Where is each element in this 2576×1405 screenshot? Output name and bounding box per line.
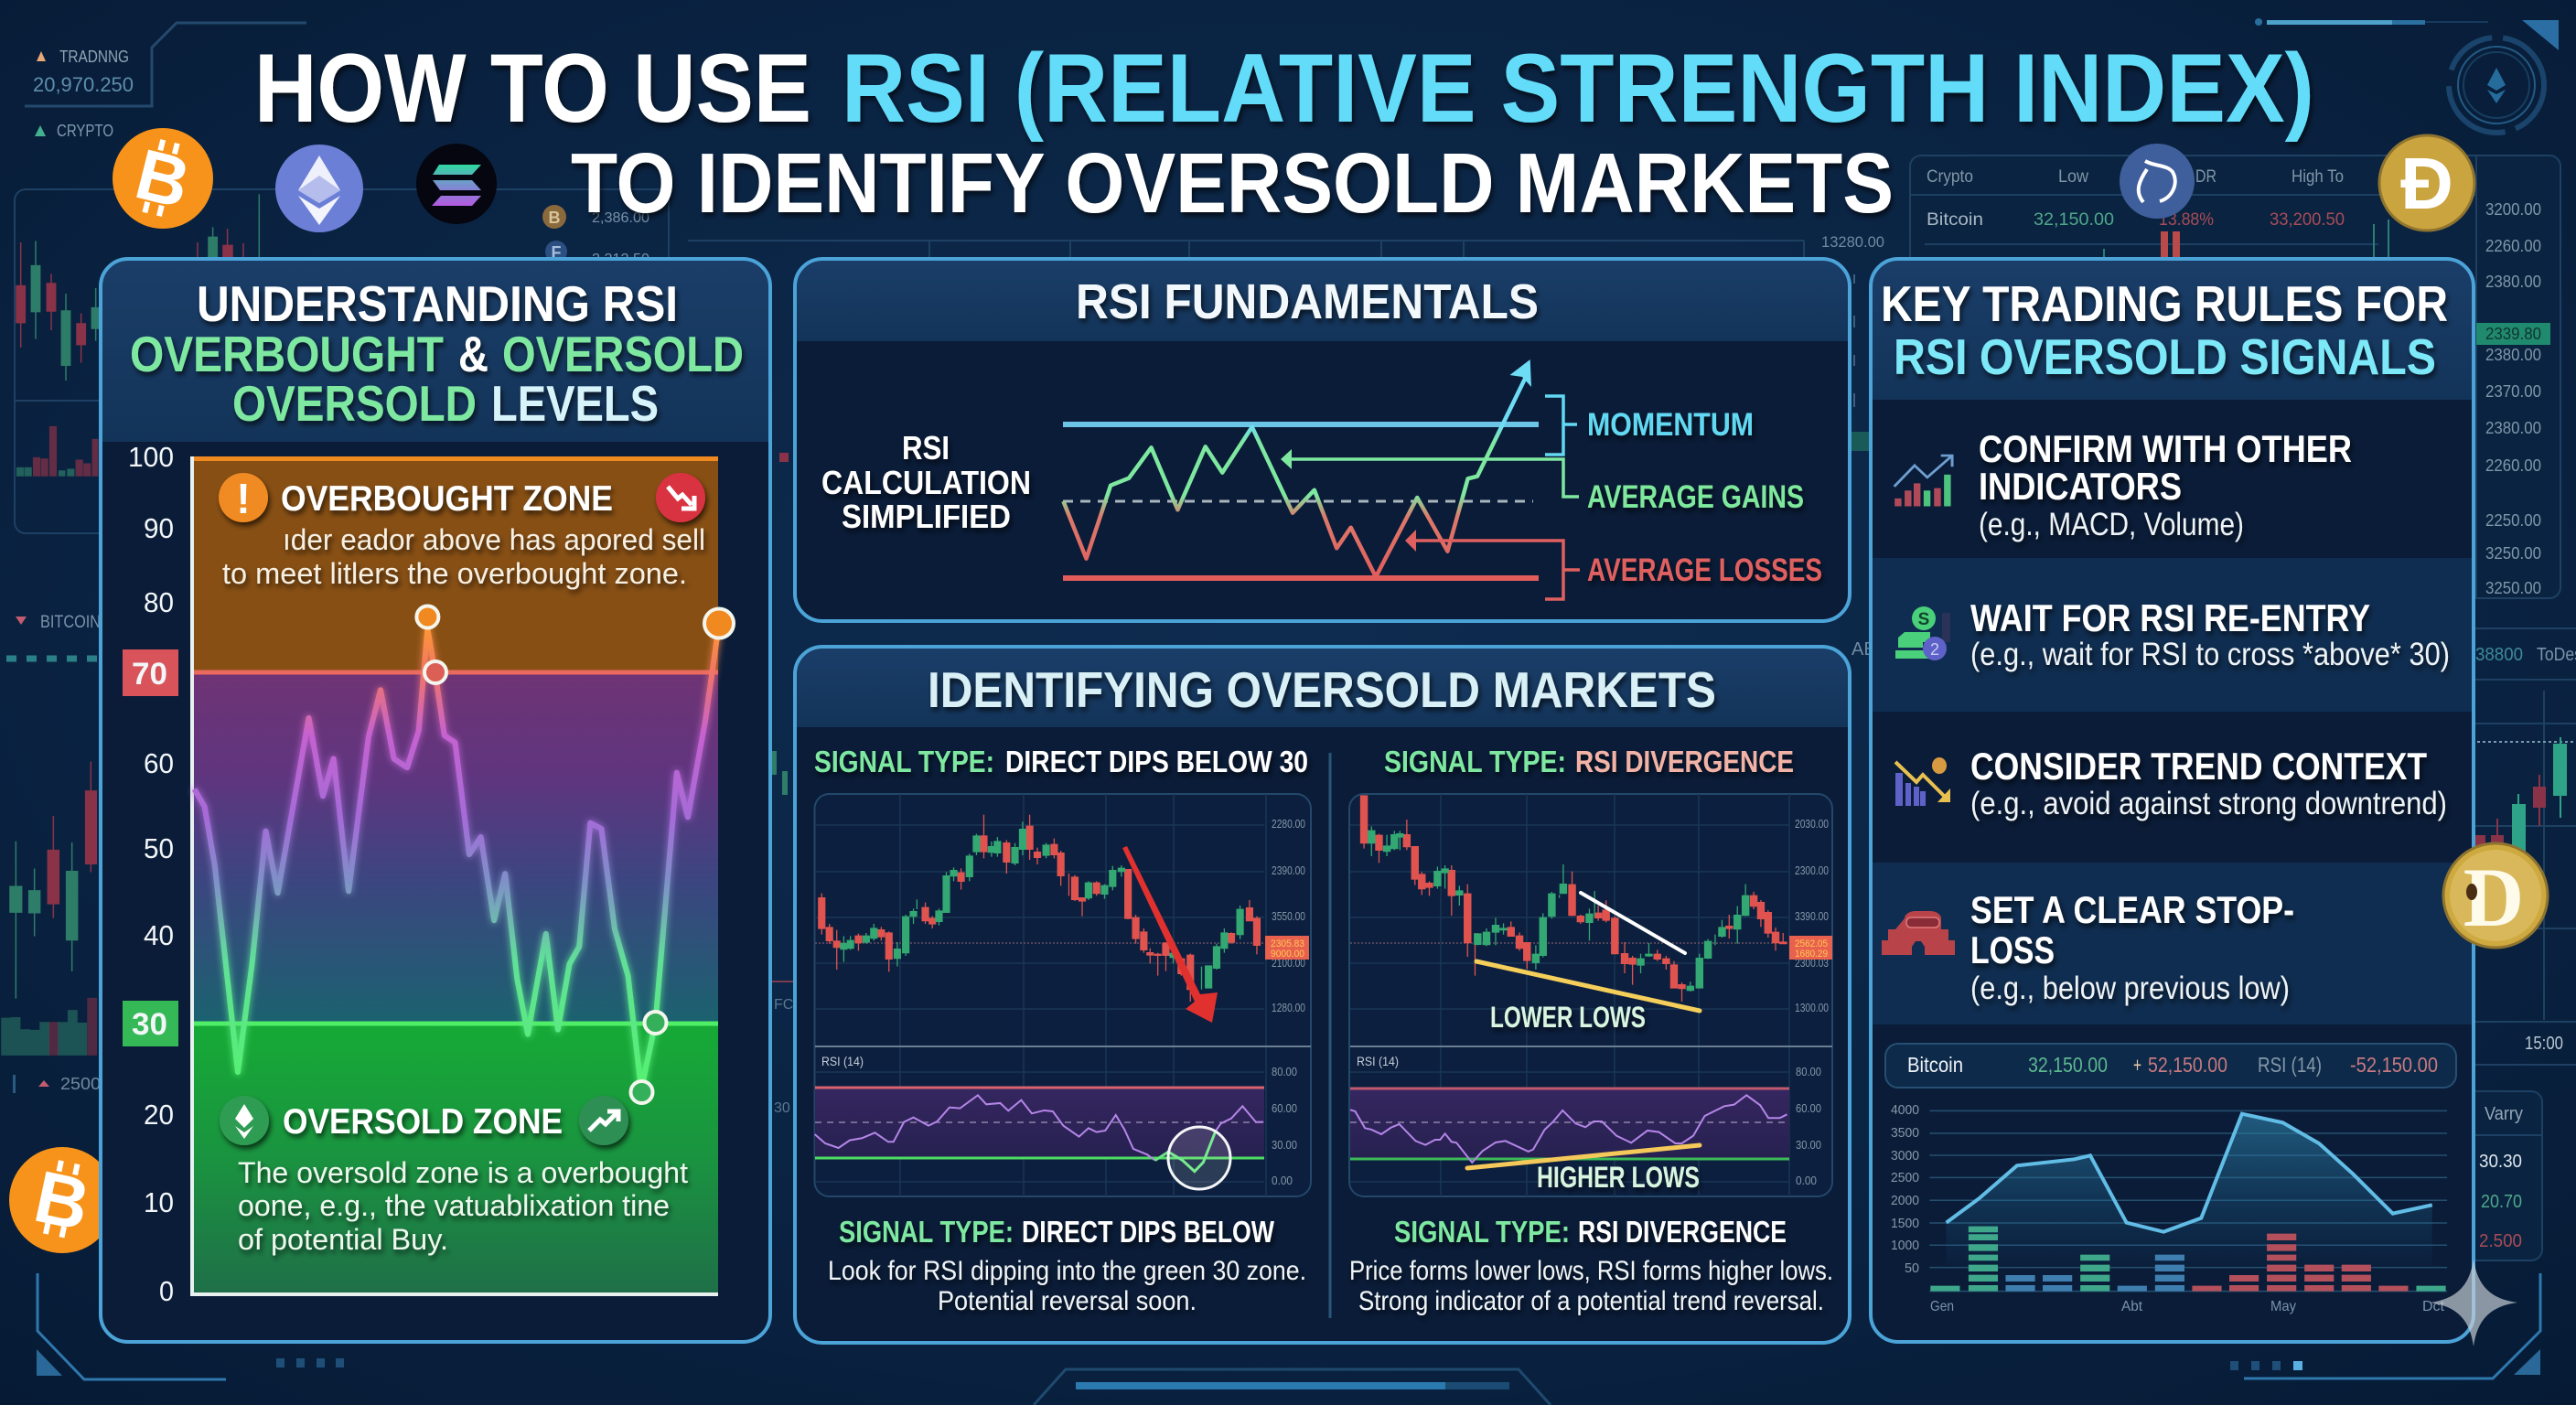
heading: key trading rules: RSI OVERSOLD SIGNALS — [1894, 328, 2436, 385]
price labels: 1280.00 — [1272, 1001, 1305, 1014]
signal description: direct dips: SIGNAL TYPE: — [839, 1215, 1014, 1249]
mini chart: 3000 — [1891, 1148, 1919, 1164]
background hud bottom centre — [1034, 1369, 1551, 1405]
background right chart strip: 20.70 — [2481, 1192, 2522, 1212]
background axis labels right: 2260.00 — [2485, 237, 2541, 255]
mini chart: 1000 — [1891, 1238, 1919, 1253]
background hud top left: TRADNNG — [59, 48, 129, 66]
signal heading: direct dips — [814, 745, 1308, 778]
icon: bitcoin coin lower left — [9, 1147, 115, 1253]
background small coins and prices: F — [551, 243, 562, 262]
price labels: RSI (14) — [821, 1054, 864, 1068]
background axis labels right: 3200.00 — [2485, 200, 2541, 219]
mini table — [1885, 1044, 2456, 1088]
background hud bottom right — [2230, 1273, 2540, 1378]
signal description: divergence: RSI DIVERGENCE — [1578, 1215, 1787, 1249]
price labels: 2305.83 — [1271, 938, 1304, 949]
rule 4: set a clear stop-loss — [1970, 888, 2294, 1006]
background marks between panels: 30 — [774, 1100, 790, 1116]
signal heading: divergence: SIGNAL TYPE: — [1384, 745, 1566, 778]
heading: understanding RSI: OVERSOLD — [502, 326, 744, 382]
label: RSI calculation simplified — [821, 429, 1031, 535]
signal heading: direct dips: SIGNAL TYPE: — [814, 745, 994, 778]
background hud top left: CRYPTO — [57, 122, 113, 140]
rule 3: consider trend context: CONSIDER TREND CONTEXT — [1970, 745, 2427, 788]
RSI zones chart — [190, 456, 734, 1294]
mini chart: Gen — [1930, 1299, 1954, 1314]
signal description: direct dips: DIRECT DIPS BELOW — [1022, 1215, 1275, 1249]
price labels: 60.00 — [1272, 1101, 1297, 1115]
axis scale: 60 — [144, 747, 174, 779]
rule 2: wait for RSI re-entry: WAIT FOR RSI RE-ENTRY — [1970, 596, 2370, 639]
price labels: 0.00 — [1272, 1174, 1293, 1187]
background crypto table top right: High To — [2292, 167, 2344, 187]
panel: understanding RSI levels — [101, 259, 770, 1342]
title — [254, 33, 2314, 231]
signal description: divergence: SIGNAL TYPE: — [1394, 1215, 1570, 1249]
momentum bracket — [1545, 396, 1577, 455]
background marks between panels — [770, 274, 1876, 1116]
price labels: 2280.00 — [1272, 817, 1305, 831]
rule 4: set a clear stop-loss: SET A CLEAR STOP- — [1970, 888, 2294, 931]
price labels — [821, 817, 1309, 1187]
label: RSI calculation simplified: SIMPLIFIED — [842, 498, 1011, 535]
labels: AVERAGE GAINS — [1587, 479, 1804, 515]
overbought zone callout: ! — [236, 475, 251, 522]
price labels: 0.00 — [1796, 1174, 1817, 1187]
icon: ethereum hud ring — [2449, 38, 2544, 133]
background axis labels right: 2370.00 — [2485, 382, 2541, 401]
title: RSI (RELATIVE STRENGTH INDEX) — [842, 33, 2314, 143]
heading: understanding RSI: LEVELS — [491, 375, 659, 432]
background crypto table top right: Bitcoin — [1927, 210, 1983, 230]
label: RSI calculation simplified: CALCULATION — [821, 464, 1031, 501]
overbought zone callout: to meet litlers the overbought zone. — [222, 557, 687, 590]
background small coins and prices: B — [549, 209, 560, 227]
mini chart: 2000 — [1891, 1193, 1919, 1208]
background axis labels right — [2476, 200, 2550, 597]
background candles top left — [16, 194, 259, 476]
signal heading: divergence — [1384, 745, 1794, 778]
RSI line — [194, 625, 719, 1089]
icon: ethereum coin — [275, 145, 363, 232]
average losses arrow — [1413, 541, 1580, 599]
background marks between panels: FC — [774, 997, 793, 1013]
icon: coins and stack: 2 — [1930, 640, 1939, 659]
background axis labels right: 3250.00 — [2485, 579, 2541, 597]
background crypto table top right: Low — [2058, 167, 2088, 187]
background axis labels right: 2339.80 — [2485, 325, 2541, 343]
background right chart strip: 38800 — [2475, 645, 2523, 665]
background crypto table top right: 32,150.00 — [2034, 210, 2114, 230]
mini chart: 3500 — [1891, 1125, 1919, 1141]
icon: blue coin — [2120, 144, 2195, 219]
overbought zone callout: ıder eador above has apored sell — [283, 523, 705, 556]
axis scale: 70 — [132, 657, 167, 692]
RSI subchart — [815, 1088, 1264, 1158]
overbought zone callout: OVERBOUGHT ZONE — [281, 479, 613, 519]
mini table: -52,150.00 — [2350, 1053, 2438, 1077]
heading: key trading rules — [1881, 275, 2448, 385]
axis scale: 90 — [144, 512, 174, 544]
panel: RSI fundamentals — [795, 259, 1850, 621]
rule 1: confirm with other indicators: INDICATORS — [1979, 465, 2182, 508]
price labels: 2300.03 — [1795, 956, 1829, 970]
background lower left ticker and candles — [2, 613, 101, 1093]
label: lower lows: LOWER LOWS — [1490, 1001, 1646, 1034]
icon: bitcoin coin — [113, 128, 213, 229]
price labels: 2100.00 — [1272, 956, 1305, 970]
heading: understanding RSI: OVERBOUGHT — [130, 326, 444, 382]
background right chart strip: 30.30 — [2479, 1152, 2522, 1172]
mini chart: 50 — [1905, 1260, 1919, 1276]
axis scale: 50 — [144, 832, 174, 864]
signal heading: divergence: RSI DIVERGENCE — [1575, 745, 1794, 778]
oversold zone callout: of potential Buy. — [238, 1223, 448, 1256]
icon: dogecoin lower: D — [2463, 851, 2524, 944]
mini chart: Abt — [2121, 1299, 2143, 1314]
background right chart strip: 2.500 — [2479, 1231, 2522, 1251]
axis scale: 40 — [144, 919, 174, 951]
momentum diagram — [1063, 359, 1822, 599]
red down arrow — [1122, 846, 1218, 1023]
axis scale: 20 — [144, 1099, 174, 1131]
RSI markers — [416, 606, 734, 1103]
axis scale: 100 — [128, 441, 174, 473]
chart: RSI divergence — [1349, 794, 1832, 1196]
heading: understanding RSI — [130, 275, 744, 432]
background small coins and prices: 2,386.00 — [592, 210, 649, 226]
average gains arrow — [1290, 459, 1579, 497]
rule 2: wait for RSI re-entry: (e.g., wait for RSI to cross *above* 30) — [1970, 637, 2450, 672]
RSI subchart — [1350, 1089, 1789, 1159]
panel: key trading rules — [1871, 259, 2474, 1342]
rule 3: consider trend context: (e.g., avoid against strong downtrend) — [1970, 786, 2447, 821]
icon: downtrend — [1895, 757, 1950, 806]
mini chart — [1891, 1102, 2447, 1314]
candlesticks — [1360, 796, 1787, 1002]
mini chart: 1500 — [1891, 1216, 1919, 1231]
signal description: direct dips — [828, 1215, 1306, 1316]
mini table: Bitcoin — [1907, 1053, 1963, 1077]
background hud top left — [25, 23, 306, 140]
price labels: 2390.00 — [1272, 863, 1305, 877]
background crypto table top right: DR — [2195, 167, 2216, 187]
icon: bars and trend line — [1894, 456, 1952, 507]
rule 1: confirm with other indicators: CONFIRM WITH OTHER — [1979, 427, 2352, 470]
mini chart: 4000 — [1891, 1102, 1919, 1118]
icon: solana coin — [416, 144, 497, 224]
rule 4: set a clear stop-loss: (e.g., below previous low) — [1970, 971, 2290, 1006]
axis scale: 80 — [144, 586, 174, 618]
price labels: 2030.00 — [1795, 817, 1829, 831]
signal description: divergence: Strong indicator of a potential trend reversal. — [1358, 1286, 1824, 1316]
background small coins and prices: 13280.00 — [1821, 233, 1884, 251]
mini table: 52,150.00 — [2148, 1053, 2227, 1077]
labels — [1587, 407, 1822, 588]
rule 4: set a clear stop-loss: LOSS — [1970, 928, 2055, 971]
background right chart strip — [2461, 628, 2576, 1260]
heading: key trading rules: KEY TRADING RULES FOR — [1881, 275, 2448, 332]
heading: understanding RSI: UNDERSTANDING RSI — [197, 275, 678, 332]
price labels: 1300.00 — [1795, 1001, 1829, 1014]
label: higher lows: HIGHER LOWS — [1537, 1161, 1700, 1194]
highlight circle — [1168, 1127, 1230, 1189]
oversold zone callout: The oversold zone is a overbought — [238, 1156, 688, 1189]
background hud top right — [2255, 18, 2559, 50]
mini table: + — [2133, 1053, 2141, 1077]
axis scale: 10 — [144, 1186, 174, 1218]
signal description: direct dips: Look for RSI dipping into the green 30 zone. — [828, 1256, 1306, 1286]
icon: coins and stack — [1895, 606, 1950, 660]
price labels: 80.00 — [1796, 1065, 1821, 1078]
oversold zone callout: OVERSOLD ZONE — [283, 1102, 563, 1142]
heading: RSI fundamentals: RSI FUNDAMENTALS — [1076, 274, 1539, 329]
price labels: 1680.29 — [1795, 949, 1828, 960]
icon: bitcoin coin: B — [128, 133, 198, 224]
oversold zone callout: oone, e.g., the vatuablixation tine — [238, 1189, 670, 1222]
background right chart strip: 15:00 — [2525, 1034, 2563, 1054]
rule 1: confirm with other indicators: (e.g., MACD, Volume) — [1979, 507, 2244, 542]
heading: understanding RSI: OVERSOLD — [232, 375, 477, 432]
panel: identifying oversold markets — [795, 647, 1850, 1343]
title: TO IDENTIFY OVERSOLD MARKETS — [571, 135, 1894, 231]
heading: identifying oversold markets: IDENTIFYING OVERSOLD MARKETS — [928, 661, 1716, 718]
background hud top left: 20,970.250 — [33, 73, 134, 96]
background axis labels right: 2260.00 — [2485, 456, 2541, 475]
background marks between panels: AB — [1852, 639, 1876, 660]
background axis labels right: 2380.00 — [2485, 273, 2541, 291]
background crypto table top right: 33,200.50 — [2270, 210, 2345, 230]
icon: stop-loss stack — [1882, 911, 1955, 955]
background crypto table top right: Crypto — [1927, 167, 1973, 187]
price labels: 3550.00 — [1272, 909, 1305, 923]
rule 2: wait for RSI re-entry — [1970, 596, 2450, 672]
axis scale — [123, 441, 178, 1307]
signal description: divergence — [1349, 1215, 1833, 1316]
icon: sparkle watermark — [2430, 1259, 2517, 1346]
labels: AVERAGE LOSSES — [1587, 552, 1822, 588]
chart: direct dips — [814, 794, 1311, 1196]
mini chart: Dct — [2422, 1299, 2445, 1314]
price labels: 30.00 — [1796, 1138, 1821, 1152]
mini chart: 2500 — [1891, 1170, 1919, 1185]
overbought zone callout — [219, 473, 705, 590]
background lower left ticker and candles: BITCOIN — [40, 613, 101, 632]
axis scale: 0 — [159, 1275, 174, 1307]
price labels: 80.00 — [1272, 1065, 1297, 1078]
price labels: RSI (14) — [1357, 1054, 1399, 1068]
signal description: direct dips: Potential reversal soon. — [938, 1286, 1197, 1316]
signal description: divergence: Price forms lower lows, RSI forms higher lows. — [1349, 1256, 1833, 1286]
price labels: 9000.00 — [1271, 949, 1304, 960]
oversold zone callout — [220, 1096, 688, 1256]
price labels: 2562.05 — [1795, 938, 1828, 949]
background axis labels right: 2380.00 — [2485, 346, 2541, 364]
price labels: 30.00 — [1272, 1138, 1297, 1152]
background chart panel top left — [15, 189, 1804, 533]
mini table: 32,150.00 — [2028, 1053, 2108, 1077]
background axis labels right: 2380.00 — [2485, 419, 2541, 437]
labels: MOMENTUM — [1587, 407, 1754, 443]
background hud lower left — [37, 1273, 344, 1379]
icon: dogecoin top — [2379, 135, 2474, 231]
icon: dogecoin lower — [2443, 843, 2548, 948]
icon: dogecoin top: Ð — [2400, 143, 2453, 224]
mini chart: May — [2270, 1299, 2296, 1314]
background crypto table top right: 13.88% — [2159, 210, 2214, 230]
background crypto table top right — [1910, 156, 2560, 598]
signal heading: direct dips: DIRECT DIPS BELOW 30 — [1005, 745, 1308, 778]
rule 1: confirm with other indicators — [1979, 427, 2352, 542]
price labels: 3390.00 — [1795, 909, 1829, 923]
background small coins and prices: 2,312.50 — [592, 252, 649, 267]
price labels — [1357, 817, 1832, 1187]
background axis labels right: 2250.00 — [2485, 511, 2541, 530]
rule 3: consider trend context — [1970, 745, 2447, 821]
background lower left ticker and candles: 2500 — [60, 1075, 101, 1093]
icon: coins and stack: S — [1918, 610, 1929, 629]
axis scale: 30 — [132, 1007, 167, 1042]
label: RSI calculation simplified: RSI — [902, 429, 950, 467]
heading: understanding RSI: & — [458, 326, 488, 382]
background axis labels right: 3250.00 — [2485, 544, 2541, 563]
trend lines — [1581, 893, 1685, 953]
background small coins and prices — [542, 205, 1884, 267]
mini table: RSI (14) — [2258, 1053, 2322, 1077]
icon: bitcoin coin lower left: B — [27, 1155, 96, 1246]
price labels: 60.00 — [1796, 1101, 1821, 1115]
price labels: 2300.00 — [1795, 863, 1829, 877]
candlesticks — [819, 815, 1260, 1002]
background right chart strip: Varry — [2485, 1104, 2523, 1124]
title: HOW TO USE — [254, 33, 811, 143]
